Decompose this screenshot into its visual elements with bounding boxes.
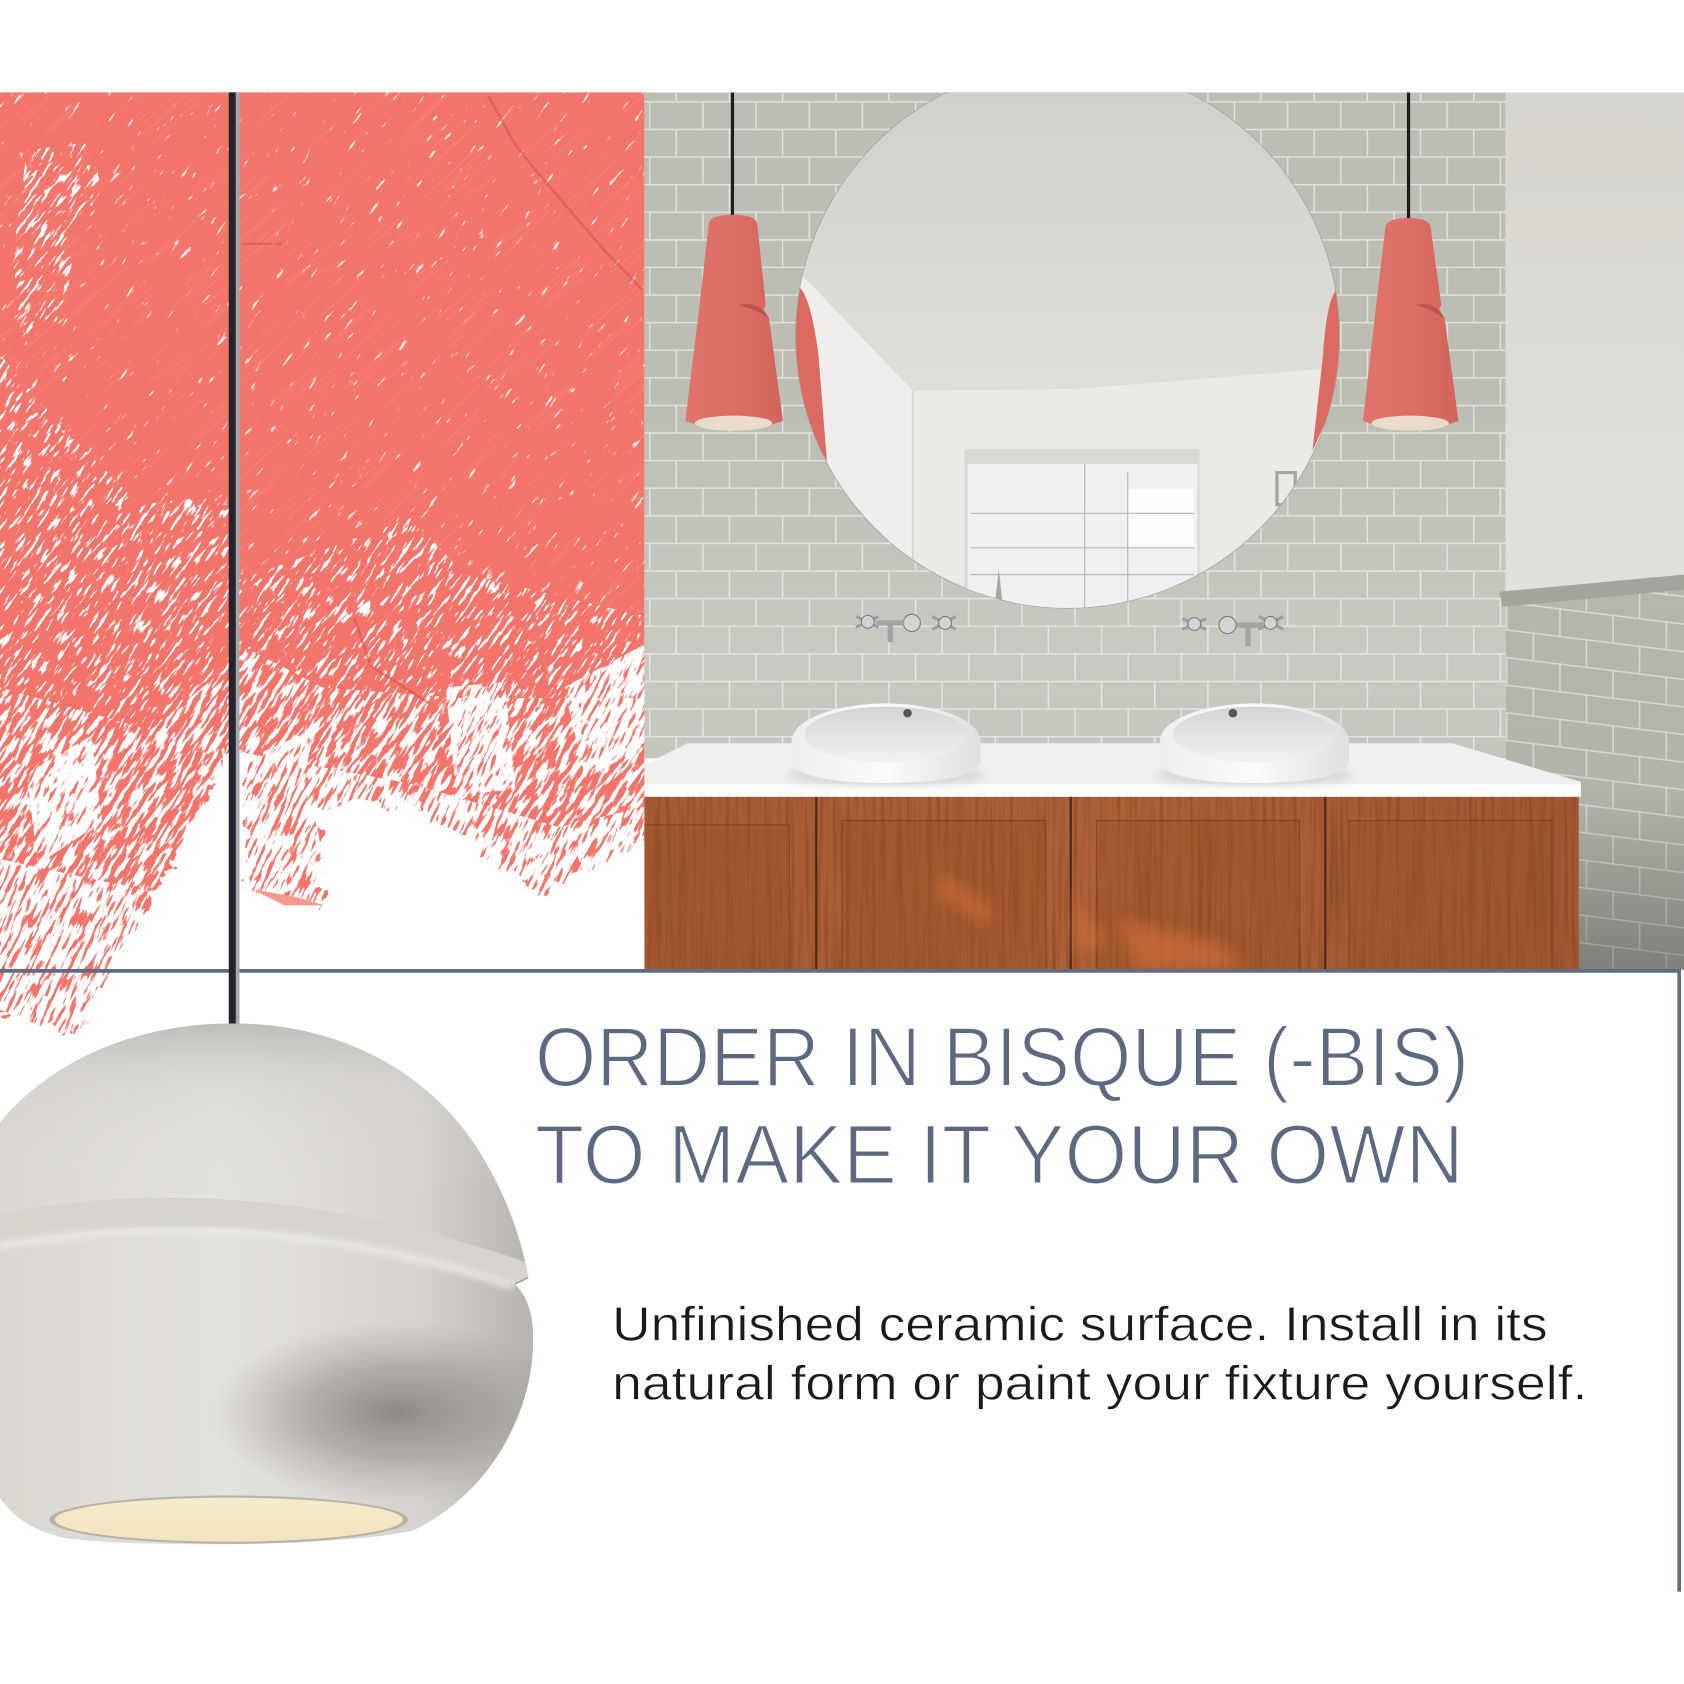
left basin [787,703,985,786]
round mirror [795,92,1340,608]
left pendant [685,92,783,431]
coral paint swatch [0,92,644,1036]
right basin [1156,703,1353,786]
right faucet [1182,616,1283,647]
description text: natural form or paint your fixture yourself. [612,1356,1587,1410]
paint ridge details [242,97,642,703]
dado trim [1499,575,1684,607]
frame line [0,971,1679,1592]
heading: TO MAKE IT YOUR OWN [535,1107,1464,1202]
reflected window [964,449,1200,621]
paint fleck tail [252,889,324,905]
countertop [644,743,1581,797]
heading [535,1009,1469,1202]
wood vanity [640,797,1579,975]
lens [49,1496,408,1544]
description text: Unfinished ceramic surface. Install in its [612,1297,1548,1351]
pendant cord [229,92,239,1027]
paint bristle texture [0,92,644,1036]
tiled back wall [644,92,1506,758]
bisque ceramic pendant [0,1024,534,1544]
right pendant [1363,92,1458,431]
paint body [0,64,687,1036]
band groove [65,1198,528,1284]
tiled side wall [1506,580,1684,970]
left faucet [856,614,956,642]
heading: ORDER IN BISQUE (-BIS) [535,1009,1469,1104]
shadow [229,1332,530,1492]
bathroom photo [640,54,1684,975]
reflected pendants [796,285,827,462]
plaster side wall [1506,92,1684,597]
description text [612,1297,1587,1410]
